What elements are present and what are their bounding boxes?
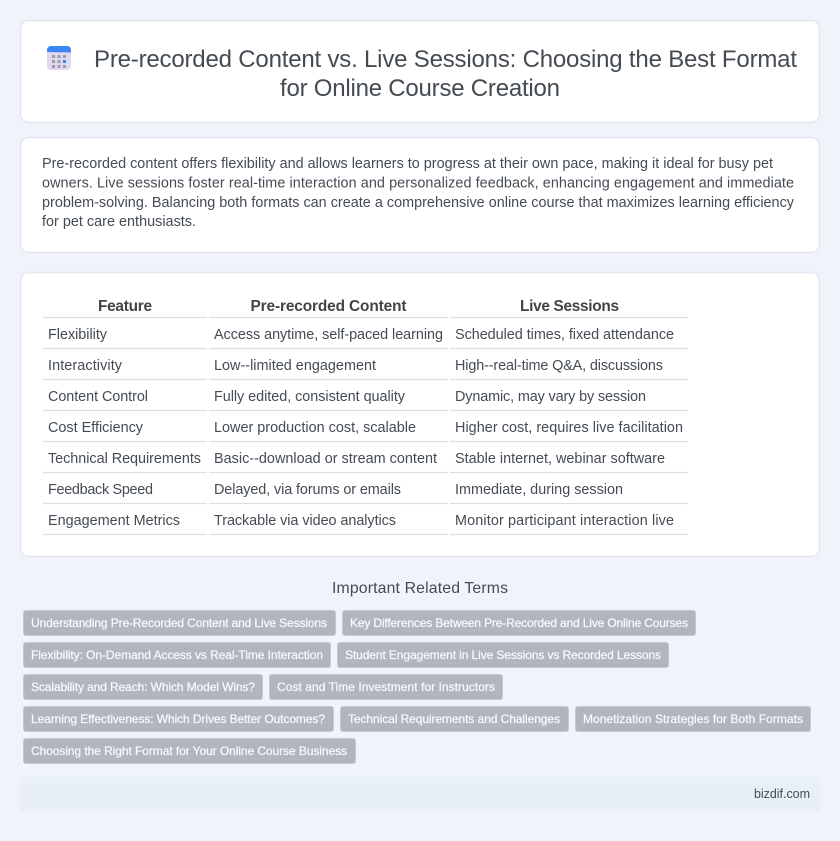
tag: Key Differences Between Pre-Recorded and Live Online Courses xyxy=(350,616,688,630)
tag: Learning Effectiveness: Which Drives Better Outcomes? xyxy=(31,712,325,726)
panel: comparison table xyxy=(20,272,820,556)
row: content control: Fully edited, consistent quality xyxy=(214,389,406,405)
row: interactivity: High--real-time Q&A, discussions xyxy=(455,358,663,374)
row: cost efficiency: Lower production cost, scalable xyxy=(214,420,416,436)
panel: summary paragraph xyxy=(20,138,820,252)
row: content control: Dynamic, may vary by session xyxy=(455,389,646,405)
tag xyxy=(340,706,568,732)
table header row: Pre-recorded Content xyxy=(250,298,406,315)
row: interactivity: Interactivity xyxy=(48,358,123,374)
summary text xyxy=(42,156,795,230)
tag xyxy=(342,610,696,636)
summary text: problem-solving. Balancing both formats can create a comprehensive online course that maximizes learning efficiency xyxy=(42,195,795,211)
summary text: owners. Live sessions foster real-time interaction and personalized feedback, enhancing engagement and immediate xyxy=(42,176,794,192)
row: feedback speed: Delayed, via forums or emails xyxy=(214,482,401,498)
icon: calendar xyxy=(47,46,71,70)
tag: Cost and Time Investment for Instructors xyxy=(277,680,495,694)
row: engagement metrics: Engagement Metrics xyxy=(48,513,180,529)
summary text: Pre-recorded content offers flexibility and allows learners to progress at their own pace, making it ideal for busy pet xyxy=(42,156,773,172)
row: feedback speed: Feedback Speed xyxy=(48,482,153,498)
panel: title header xyxy=(20,20,820,122)
row: cost efficiency xyxy=(48,420,683,436)
row: cost efficiency: Cost Efficiency xyxy=(48,420,144,436)
row: feedback speed: Immediate, during session xyxy=(455,482,623,498)
row: content control xyxy=(48,389,646,405)
row: engagement metrics xyxy=(48,513,674,529)
tag xyxy=(576,706,810,732)
row: technical requirements xyxy=(48,451,665,467)
title: for Online Course Creation xyxy=(280,75,560,102)
row: content control: Content Control xyxy=(48,389,148,405)
tag xyxy=(270,674,502,700)
tag: Monetization Strategies for Both Formats xyxy=(583,712,803,726)
row: flexibility: Scheduled times, fixed attendance xyxy=(455,327,674,343)
tag xyxy=(24,738,356,764)
tag: Understanding Pre-Recorded Content and Live Sessions xyxy=(31,616,327,630)
row: flexibility: Flexibility xyxy=(48,327,108,343)
tag: Student Engagement in Live Sessions vs Recorded Lessons xyxy=(345,648,661,662)
row: technical requirements: Technical Requirements xyxy=(48,451,201,467)
row: engagement metrics: Trackable via video analytics xyxy=(214,513,396,529)
tag xyxy=(24,674,262,700)
row: flexibility: Access anytime, self-paced learning xyxy=(214,327,443,343)
row: technical requirements: Basic--download or stream content xyxy=(214,451,437,467)
table header row: Feature xyxy=(98,298,152,315)
row: interactivity: Low--limited engagement xyxy=(214,358,376,374)
row: feedback speed xyxy=(48,482,623,498)
tag: Technical Requirements and Challenges xyxy=(348,712,560,726)
row: interactivity xyxy=(48,358,663,374)
table header row xyxy=(98,298,619,315)
tag: Flexibility: On-Demand Access vs Real-Time Interaction xyxy=(31,648,323,662)
table header row: Live Sessions xyxy=(520,298,619,315)
related terms tag list xyxy=(24,610,810,764)
row: technical requirements: Stable internet, webinar software xyxy=(455,451,665,467)
footer source: bizdif.com xyxy=(754,787,810,801)
tag xyxy=(24,706,334,732)
tag xyxy=(338,642,668,668)
tag xyxy=(24,642,330,668)
title: Pre-recorded Content vs. Live Sessions: Choosing the Best Format xyxy=(94,46,797,73)
row: cost efficiency: Higher cost, requires live facilitation xyxy=(455,420,683,436)
title xyxy=(94,46,797,102)
row: engagement metrics: Monitor participant interaction live xyxy=(455,513,674,529)
tag: Scalability and Reach: Which Model Wins? xyxy=(31,680,255,694)
row: flexibility xyxy=(48,327,674,343)
summary text: for pet care enthusiasts. xyxy=(42,214,196,230)
tag xyxy=(24,610,336,636)
heading: important related terms: Important Related Terms xyxy=(332,580,508,597)
tag: Choosing the Right Format for Your Online Course Business xyxy=(31,744,347,758)
footer bar xyxy=(20,777,820,811)
